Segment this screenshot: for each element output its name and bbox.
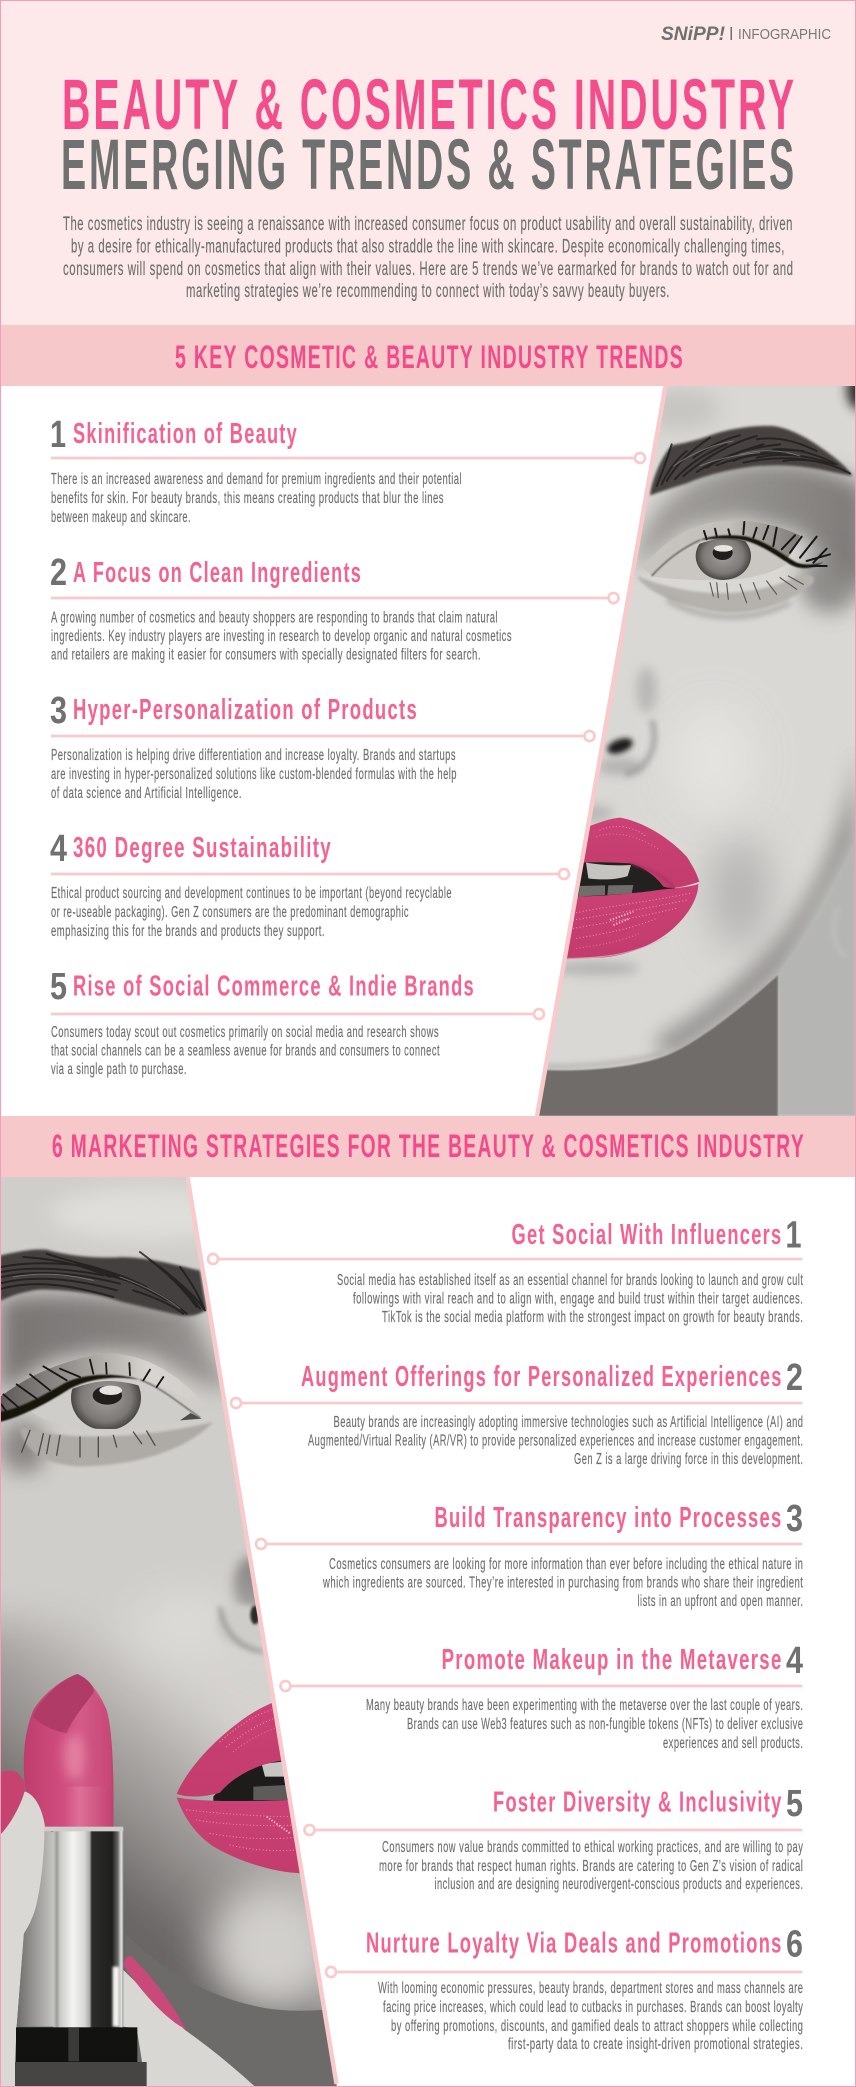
- trend 3: Personalization is helping drive differentiation and increase loyalty. Brands and startups: [51, 747, 456, 764]
- strategy 4: [280, 1640, 803, 1752]
- trend 2: [50, 552, 618, 664]
- trend 1: benefits for skin. For beauty brands, this means creating products that blur the lines: [51, 490, 444, 507]
- eye: [0, 1354, 213, 1466]
- strategy 5: [304, 1783, 803, 1893]
- trend 2: 2: [50, 552, 67, 594]
- eyebrow: [0, 1249, 207, 1316]
- logo: Snipp infographic: [661, 24, 831, 45]
- photo: face with eye and pink lips: [530, 369, 856, 1116]
- trend 1: Skinification of Beauty: [73, 418, 298, 450]
- panel: 6 marketing strategies: [208, 1214, 803, 2053]
- hand and lipstick: [0, 1674, 255, 2087]
- trend 2: A Focus on Clean Ingredients: [73, 557, 362, 589]
- nose: [590, 666, 660, 825]
- lips: [563, 818, 699, 959]
- lips: [177, 1702, 302, 1873]
- trend 1: 1: [50, 414, 66, 456]
- fingers: [0, 1792, 45, 2087]
- lipstick base: [15, 2027, 147, 2087]
- strategy 2: 2: [786, 1357, 803, 1399]
- panel: 5 key trends: [50, 414, 645, 1078]
- eye socket shadow: [0, 1294, 233, 1394]
- trend 5: [50, 966, 544, 1078]
- strategy 5: 5: [786, 1783, 803, 1825]
- trend 1: between makeup and skincare.: [51, 509, 191, 526]
- title: [61, 66, 797, 205]
- trend 4: emphasizing this for the brands and products they support.: [51, 923, 325, 940]
- photo: eye, lipstick and pink lips: [0, 1177, 340, 2087]
- strategy 6: [326, 1924, 803, 2053]
- cheek shading: [0, 1620, 340, 2087]
- trend 4: 4: [50, 828, 67, 870]
- logo: Snipp infographic: INFOGRAPHIC: [738, 27, 831, 43]
- lipstick bullet: [24, 1674, 114, 1828]
- trend 3: of data science and Artificial Intelligence.: [51, 785, 242, 802]
- trend 2: ingredients. Key industry players are investing in research to develop organic and natural cosmetics: [51, 628, 512, 645]
- lipstick tube: [44, 1827, 123, 2028]
- trend 2: and retailers are making it easier for consumers with specially designated filters for search.: [51, 647, 481, 664]
- intro paragraph: [63, 214, 794, 302]
- trend 1: [50, 414, 645, 526]
- logo: Snipp infographic: SNiPP!: [661, 24, 725, 45]
- trend 3: are investing in hyper-personalized solutions like custom-blended formulas with the help: [51, 766, 457, 783]
- header panel: [0, 0, 856, 325]
- trend 5: Rise of Social Commerce & Indie Brands: [73, 970, 475, 1002]
- strategy 1: [208, 1214, 803, 1326]
- strategy 2: [231, 1357, 803, 1468]
- trend 5: that social channels can be a seamless avenue for brands and consumers to connect: [51, 1042, 440, 1060]
- trend 5: via a single path to purchase.: [51, 1061, 187, 1078]
- trend 4: [50, 828, 569, 940]
- strategy 3: [256, 1498, 803, 1610]
- trend 5: Consumers today scout out cosmetics primarily on social media and research shows: [51, 1024, 439, 1041]
- strategy 4: 4: [786, 1640, 803, 1682]
- section band: strategies: [0, 1116, 856, 1177]
- trend 4: Ethical product sourcing and development continues to be important (beyond recyclable: [51, 885, 452, 902]
- nails: [0, 1770, 186, 2029]
- trend 5: 5: [50, 966, 67, 1008]
- diagonal photo edge: [537, 386, 666, 1116]
- section band: trends: [0, 325, 856, 386]
- jaw shading: [657, 747, 856, 1058]
- strategy 6: 6: [786, 1924, 803, 1966]
- nose: [215, 1605, 272, 1652]
- trend 2: A growing number of cosmetics and beauty shoppers are responding to brands that claim natural: [51, 609, 498, 626]
- diagonal photo edge: [188, 1177, 336, 2084]
- trend 1: There is an increased awareness and demand for premium ingredients and their potential: [51, 471, 462, 488]
- trend 4: or re-useable packaging). Gen Z consumers are the predominant demographic: [51, 904, 409, 921]
- strategy 1: 1: [786, 1214, 802, 1256]
- eye: [637, 520, 830, 617]
- trend 4: 360 Degree Sustainability: [73, 832, 332, 864]
- strategy 3: 3: [786, 1498, 803, 1540]
- trend 3: 3: [50, 690, 67, 732]
- eyebrow: [650, 426, 853, 495]
- trend 3: [50, 690, 594, 802]
- trend 3: Hyper-Personalization of Products: [73, 694, 418, 726]
- eye socket shadow: [633, 462, 856, 593]
